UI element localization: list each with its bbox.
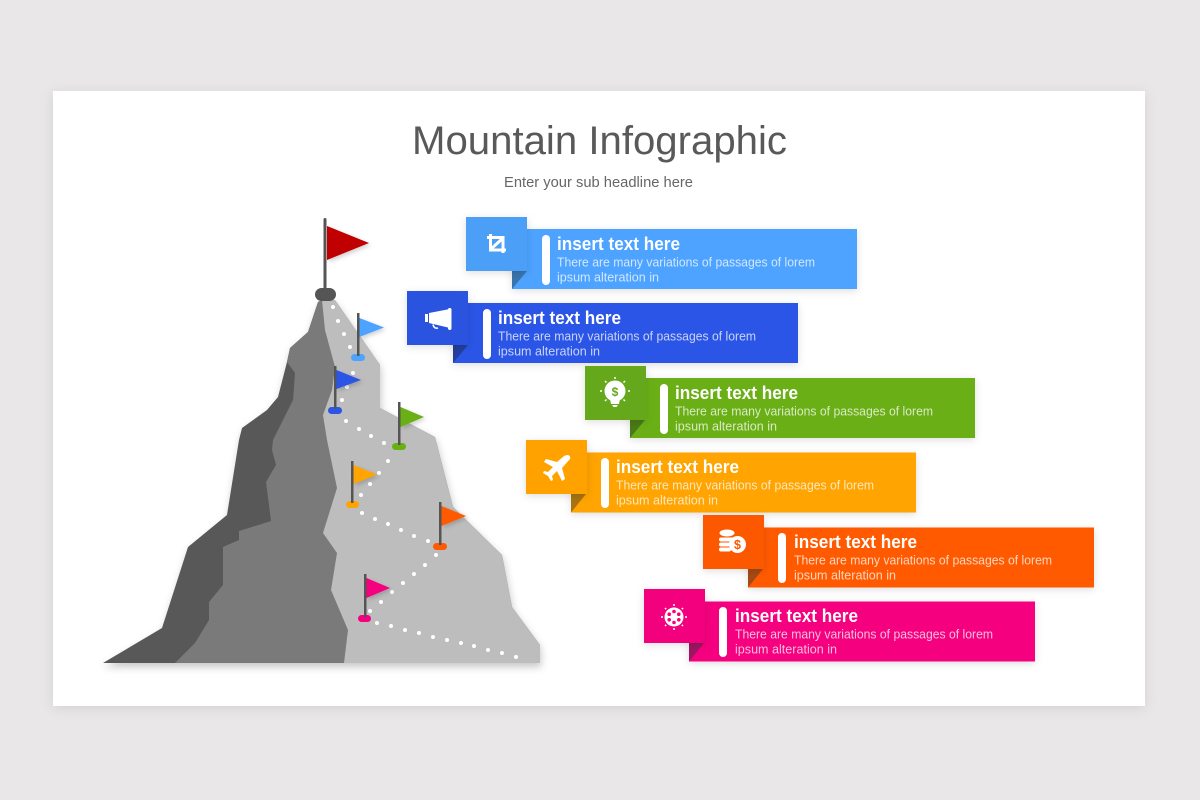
banner 5: deep orange: ipsum alteration in <box>794 568 896 582</box>
mountain: mid face <box>175 300 350 663</box>
banner 5: deep orange <box>703 515 1094 588</box>
main card <box>53 91 1145 706</box>
flag: green <box>392 402 424 450</box>
summit flag: red <box>315 218 369 301</box>
mountain illustration <box>103 218 540 663</box>
banner 6: pink: insert text here <box>735 606 858 626</box>
banner 3: green: insert text here <box>675 383 798 403</box>
subtitle: Enter your sub headline here <box>504 175 693 191</box>
icon: megaphone <box>425 308 452 330</box>
banner 5: deep orange: insert text here <box>794 532 917 552</box>
trail dots <box>331 305 518 659</box>
banner 4: orange: insert text here <box>616 457 739 477</box>
banner 2: navy blue: ipsum alteration in <box>498 344 600 358</box>
banner 4: orange: ipsum alteration in <box>616 494 718 508</box>
banner 5: deep orange: There are many variations of passages of lorem <box>794 554 1052 568</box>
banner 6: pink: There are many variations of passages of lorem <box>735 628 993 642</box>
banner 4: orange: There are many variations of passages of lorem <box>616 478 874 492</box>
icon: crop <box>487 234 506 253</box>
flag: orange <box>346 461 377 508</box>
title: Mountain Infographic <box>412 119 787 163</box>
banner 1: light blue: There are many variations of passages of lorem <box>557 256 815 270</box>
banner 2: navy blue: There are many variations of passages of lorem <box>498 330 756 344</box>
banner 1: light blue <box>466 217 857 289</box>
banner 6: pink <box>644 589 1035 662</box>
icon: ship wheel <box>661 604 687 630</box>
flag: pink <box>358 574 390 622</box>
banner 1: light blue: insert text here <box>557 234 680 254</box>
banner 3: green <box>585 366 975 438</box>
icon: coins: $ <box>734 538 741 552</box>
banner 3: green: ipsum alteration in <box>675 420 777 434</box>
banner 6: pink: ipsum alteration in <box>735 642 837 656</box>
icon: coins <box>719 530 746 553</box>
banner 2: navy blue <box>407 291 798 363</box>
flag: light blue <box>351 313 384 361</box>
mountain: light face <box>322 300 540 663</box>
banner 2: navy blue: insert text here <box>498 308 621 328</box>
flag: deep orange <box>433 502 466 550</box>
mountain silhouette: dark face and shadow <box>103 300 540 663</box>
banner 1: light blue: ipsum alteration in <box>557 270 659 284</box>
banner 3: green: There are many variations of passages of lorem <box>675 404 933 418</box>
banner 4: orange <box>526 440 916 512</box>
icon: light bulb with dollar <box>600 377 630 407</box>
icon: airplane <box>543 455 570 481</box>
flag: navy blue <box>328 366 361 414</box>
icon: light bulb with dollar: $ <box>612 385 619 399</box>
